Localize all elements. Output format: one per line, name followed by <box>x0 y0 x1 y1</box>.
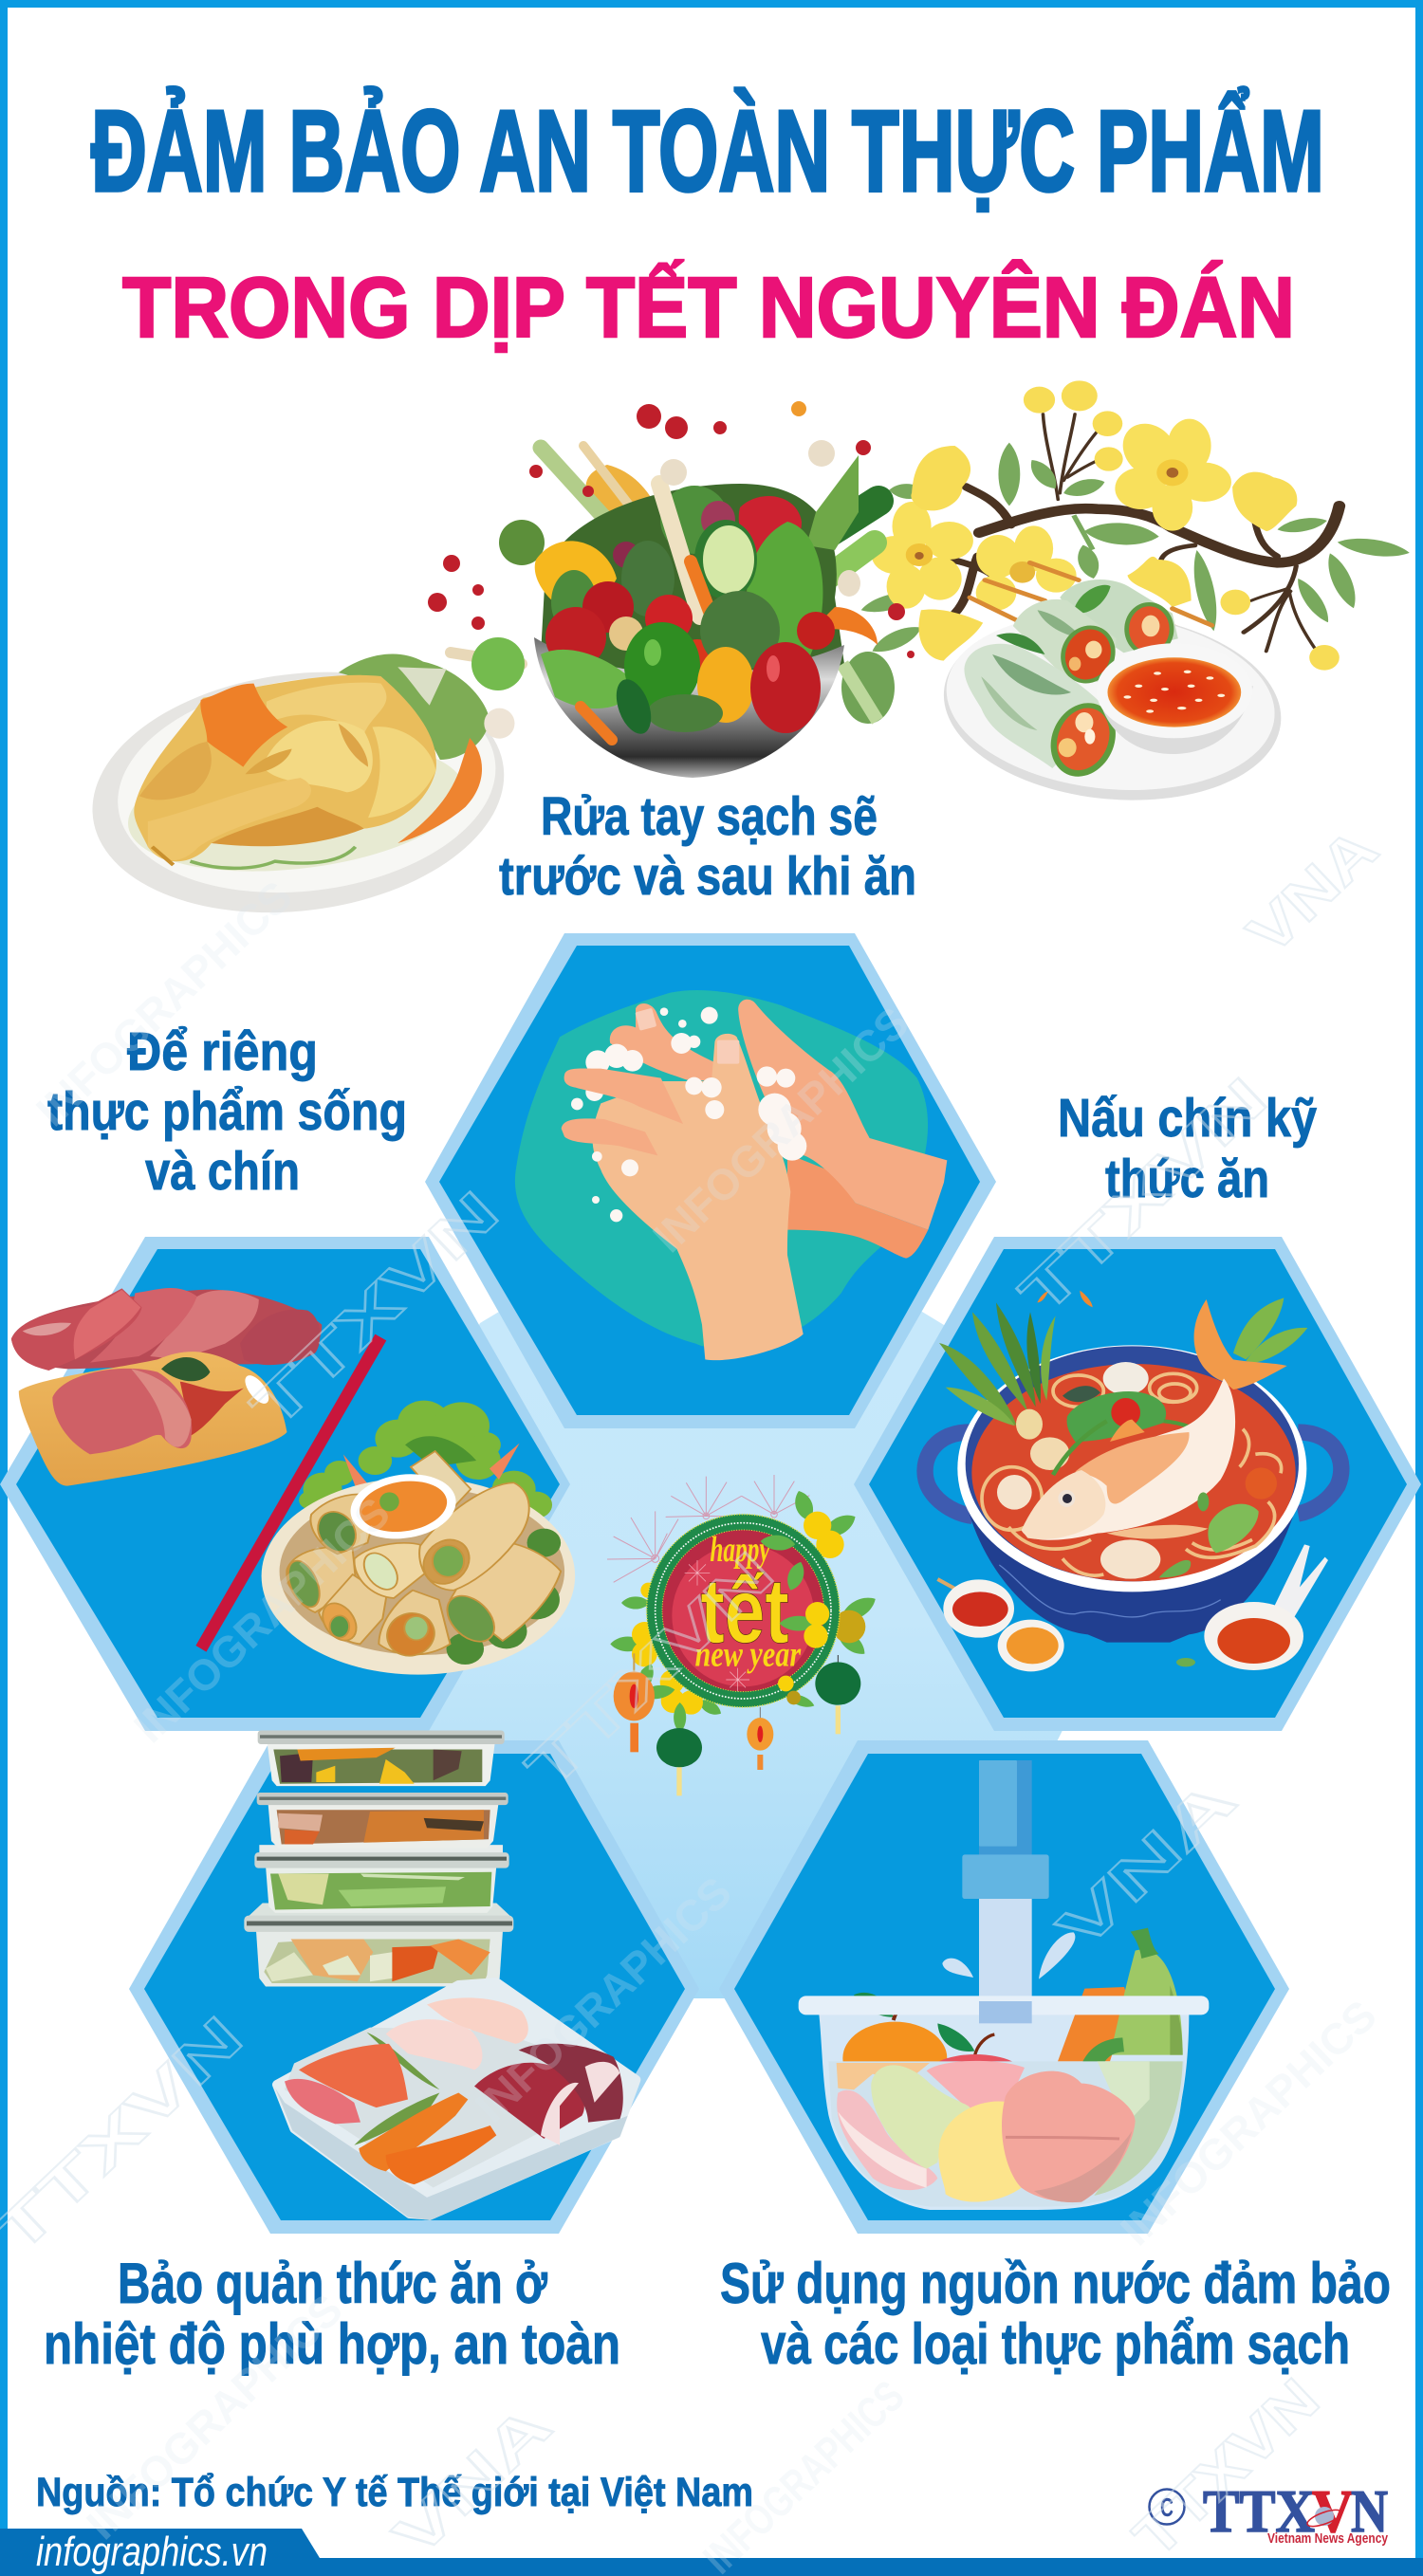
heading: cook thoroughly: thức ăn <box>1105 1149 1269 1209</box>
panel: safe storage hexagon <box>129 1730 699 2234</box>
watermark: INFOGRAPHICS <box>124 1488 399 1752</box>
back hand shadow <box>787 1154 928 1259</box>
illustration: glass boxes and tray <box>244 1730 637 2220</box>
juice splash <box>586 465 669 564</box>
wreath text: happy <box>710 1530 770 1570</box>
carrot garnish right <box>397 738 482 843</box>
wreath ring <box>647 1515 840 1707</box>
fish tail <box>1194 1299 1287 1389</box>
watermark: VNA <box>1045 1766 1248 1963</box>
watermark: TTXVN <box>239 1179 511 1442</box>
box 1 <box>258 1730 505 1786</box>
back leaves and flowers <box>610 1488 879 1719</box>
roll front <box>964 644 1124 782</box>
bowl back <box>819 2014 1189 2210</box>
carrot and mid vegetables <box>551 541 878 670</box>
title line 2: TRONG DỊP TẾT NGUYÊN ĐÁN <box>122 259 1295 356</box>
pot rim <box>957 1345 1306 1592</box>
cucumber garnish <box>191 847 356 868</box>
heading: wash hands: trước và sau khi ăn <box>499 846 916 907</box>
back hand <box>738 1000 947 1230</box>
logo: TTXVN <box>1150 2477 1389 2547</box>
vegetable pile base <box>541 484 844 691</box>
raw meat slices <box>11 1288 322 1371</box>
dumplings <box>997 1409 1160 1579</box>
green pepper stem <box>1075 2037 1124 2084</box>
globe <box>1315 2507 1334 2526</box>
front hand <box>593 1034 804 1360</box>
fish slices <box>386 2019 482 2070</box>
heading: safe storage: nhiệt độ phù hợp, an toàn <box>44 2312 620 2376</box>
back vegetables <box>499 455 859 664</box>
celery and radish stalks <box>451 446 878 664</box>
flower clusters and buds <box>911 380 1340 671</box>
watermark: TTXVN <box>1121 2366 1332 2570</box>
illustration: fish soup pot <box>925 1291 1341 1671</box>
watermark: TTXVN <box>514 1539 786 1802</box>
fireworks <box>607 1475 809 1582</box>
green lantern right <box>815 1655 860 1734</box>
heading: safe storage <box>44 2252 620 2376</box>
heading: separate raw and cooked: Để riêng <box>127 1021 318 1082</box>
watermark: INFOGRAPHICS <box>1111 1991 1386 2254</box>
lettuce <box>339 653 489 760</box>
water stream <box>979 1899 1032 2060</box>
garlic <box>1103 1362 1149 1395</box>
heading: safe storage: Bảo quản thức ăn ở <box>118 2252 547 2315</box>
red divider line <box>195 1334 386 1652</box>
illustration: happy Tet wreath <box>607 1475 879 1795</box>
wordmark: TTX <box>1203 2477 1315 2545</box>
faucet pipe <box>979 1760 1032 1855</box>
pot handles <box>925 1432 1341 1516</box>
greens bunch left <box>939 1302 1056 1426</box>
source line: Nguồn: Tổ chức Y tế Thế giới tại Việt Nam <box>36 2470 753 2515</box>
watermark: INFOGRAPHICS <box>77 2285 352 2548</box>
zucchini <box>1110 1928 1183 2055</box>
water splashes <box>942 1932 1075 1979</box>
apple <box>925 2023 1026 2100</box>
heading: cook thoroughly <box>1058 1088 1317 1209</box>
watermark: TTXVN <box>1007 1065 1280 1328</box>
branch <box>952 414 1340 652</box>
illustration: apricot branch and spring rolls <box>859 380 1411 818</box>
green lantern <box>656 1728 702 1795</box>
dipping sauce bowl <box>1097 643 1253 754</box>
side dishes <box>937 1544 1328 1671</box>
steel bowl <box>534 637 844 778</box>
faucet flange <box>962 1854 1049 1899</box>
wreath text: tết <box>700 1560 789 1663</box>
mushroom <box>484 708 514 739</box>
heading: separate raw and cooked <box>47 1021 407 1202</box>
front vegetables <box>541 591 821 740</box>
panel: centre hexagon background <box>305 1312 1100 1998</box>
flower: large top <box>1113 416 1231 531</box>
site name: infographics.vn <box>36 2529 268 2575</box>
salmon <box>299 2044 408 2107</box>
tomato and vegetables <box>1159 1467 1277 1577</box>
greens right <box>1233 1297 1307 1363</box>
flower: middle <box>976 525 1077 611</box>
leafy garnish <box>1053 1386 1208 1475</box>
cucumber slice <box>694 520 757 599</box>
heading: clean water <box>720 2252 1391 2376</box>
roll middle <box>996 599 1120 687</box>
sparkles <box>685 1560 749 1691</box>
top back fingers <box>610 1003 714 1081</box>
front leaves and flowers <box>633 1534 829 1733</box>
red meat <box>474 2063 584 2139</box>
soap foam <box>571 1007 806 1222</box>
illustration: faucet and glass bowl of produce <box>799 1760 1209 2210</box>
sauce dish <box>343 1466 463 1547</box>
water tint over stream <box>979 2001 1032 2023</box>
lanterns <box>614 1653 860 1795</box>
heading: separate raw and cooked: và chín <box>145 1141 300 1202</box>
carrot <box>1058 1987 1129 2061</box>
broccoli right and left lettuce <box>471 637 895 724</box>
left fingers over palm <box>564 1069 683 1124</box>
copyright mark: C <box>1160 2493 1174 2522</box>
wordmark <box>1203 2477 1388 2545</box>
watermark: INFOGRAPHICS <box>27 872 302 1135</box>
spring roll plate <box>262 1401 575 1675</box>
mushrooms <box>660 440 860 597</box>
meat on board <box>180 1382 244 1435</box>
box 4 <box>244 1904 513 1986</box>
noodles <box>982 1373 1282 1575</box>
plate <box>930 596 1296 818</box>
icon: washing hands <box>515 990 947 1360</box>
board handle hole <box>240 1372 273 1407</box>
wreath text <box>694 1530 802 1675</box>
copyright mark <box>1150 2489 1184 2525</box>
chopsticks <box>970 562 1211 635</box>
plate <box>70 645 527 939</box>
heading: wash hands <box>499 786 916 907</box>
watermark: VNA <box>381 2392 564 2570</box>
illustration: raw meat and cooked rolls <box>11 1288 575 1675</box>
title <box>91 85 1324 356</box>
pot decoration <box>999 1565 1221 1617</box>
spring rolls <box>282 1451 561 1662</box>
flying cherry tomatoes <box>428 401 915 658</box>
panel: cook thoroughly hexagon <box>854 1237 1421 1731</box>
wordmark: V <box>1312 2477 1354 2545</box>
watermark: INFOGRAPHICS <box>643 998 918 1261</box>
heading: cook thoroughly: Nấu chín kỹ <box>1058 1088 1317 1149</box>
agency name: Vietnam News Agency <box>1267 2530 1389 2547</box>
fingernails <box>635 1008 739 1064</box>
roll back right <box>1060 580 1178 656</box>
flower: left <box>872 502 973 609</box>
orange lantern left <box>614 1653 655 1752</box>
panel: wash hands hexagon <box>425 933 996 1428</box>
panel: clean water hexagon <box>719 1740 1289 2234</box>
illustration: vegetables in steel bowl <box>428 401 915 778</box>
orange lantern middle <box>747 1707 773 1770</box>
foam behind fingers <box>585 1044 643 1101</box>
bowl rim <box>799 1996 1209 2015</box>
teal blob <box>515 990 928 1349</box>
carrot garnish top <box>200 684 287 767</box>
wordmark: N <box>1351 2477 1388 2545</box>
fish body <box>1022 1378 1235 1540</box>
shrimp <box>359 2093 468 2171</box>
heading: separate raw and cooked: thực phẩm sống <box>47 1081 407 1142</box>
footer band <box>0 2529 1423 2576</box>
watermark: INFOGRAPHICS <box>466 1868 741 2131</box>
illustration: boiled chicken plate <box>70 645 527 939</box>
watermark <box>0 816 1391 2576</box>
pot body <box>961 1467 1306 1643</box>
lettuce <box>354 2033 439 2145</box>
watermark: VNA <box>1235 816 1391 967</box>
panel: separate raw and cooked hexagon <box>0 1237 575 1731</box>
water level produce <box>828 2061 1184 2207</box>
orange <box>842 1993 947 2094</box>
box 3 <box>254 1845 509 1913</box>
soup <box>971 1364 1296 1581</box>
garnish petals <box>1037 1292 1048 1302</box>
watermark: INFOGRAPHICS <box>693 2371 914 2576</box>
chicken <box>134 675 436 865</box>
box 2 <box>257 1793 508 1849</box>
leaves <box>859 443 1411 658</box>
wreath text: new year <box>694 1635 802 1675</box>
storage tray <box>275 1982 637 2220</box>
cutting board <box>19 1352 286 1486</box>
heading: wash hands: Rửa tay sạch sẽ <box>541 786 878 847</box>
